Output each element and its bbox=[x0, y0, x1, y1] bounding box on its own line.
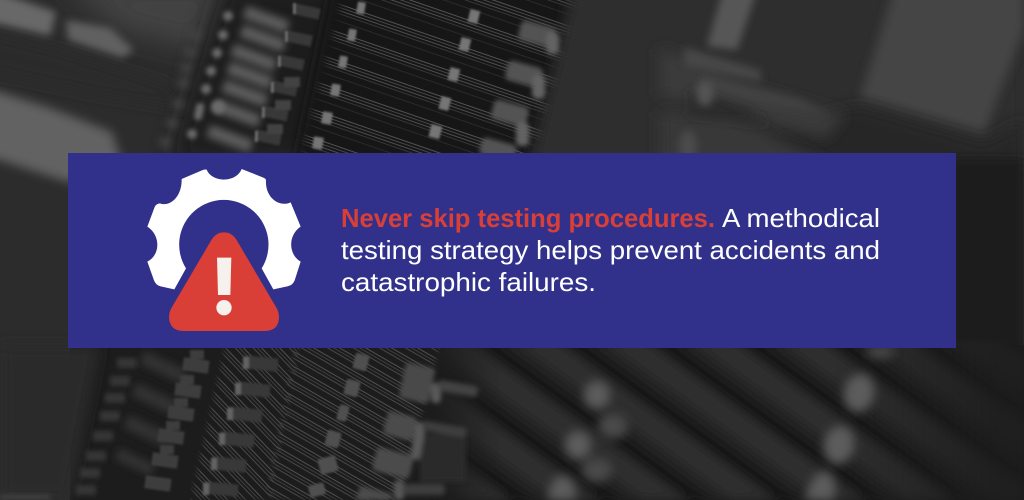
blurred left coil bottom bbox=[76, 350, 210, 495]
icon: gear with warning triangle bbox=[147, 169, 301, 331]
icon: exclamation mark bbox=[216, 258, 232, 315]
photo region: top left blurred bars bbox=[0, 0, 240, 182]
icon: gear bbox=[147, 169, 301, 289]
text block: testing message bbox=[341, 203, 880, 297]
text block: testing message: testing strategy helps prevent accidents and bbox=[341, 235, 880, 265]
far blurred bands bottom bbox=[464, 348, 937, 500]
text block: testing message: catastrophic failures. bbox=[341, 267, 596, 297]
photo region: dark coil body top bbox=[170, 0, 640, 165]
text block: testing message: Never skip testing procedures. bbox=[341, 203, 715, 233]
left coil top details bbox=[159, 3, 321, 152]
far blurred nodes bottom bbox=[548, 346, 894, 500]
blurred large tabs top bbox=[478, 20, 559, 163]
photo region: top right blurred bbox=[530, 0, 1024, 165]
side strip right bbox=[950, 158, 1024, 353]
text block: testing message: A methodical bbox=[722, 203, 880, 233]
panel: blue callout bbox=[68, 153, 956, 348]
wire tabs top bbox=[312, 1, 480, 150]
icon: warning triangle bbox=[169, 232, 279, 331]
blurred large tabs bottom bbox=[356, 362, 479, 500]
photo region: bottom base bbox=[0, 345, 1024, 500]
wire tabs bottom bbox=[203, 352, 370, 498]
sharp strands bottom bbox=[190, 345, 440, 500]
sharp strands top bbox=[301, 0, 578, 153]
